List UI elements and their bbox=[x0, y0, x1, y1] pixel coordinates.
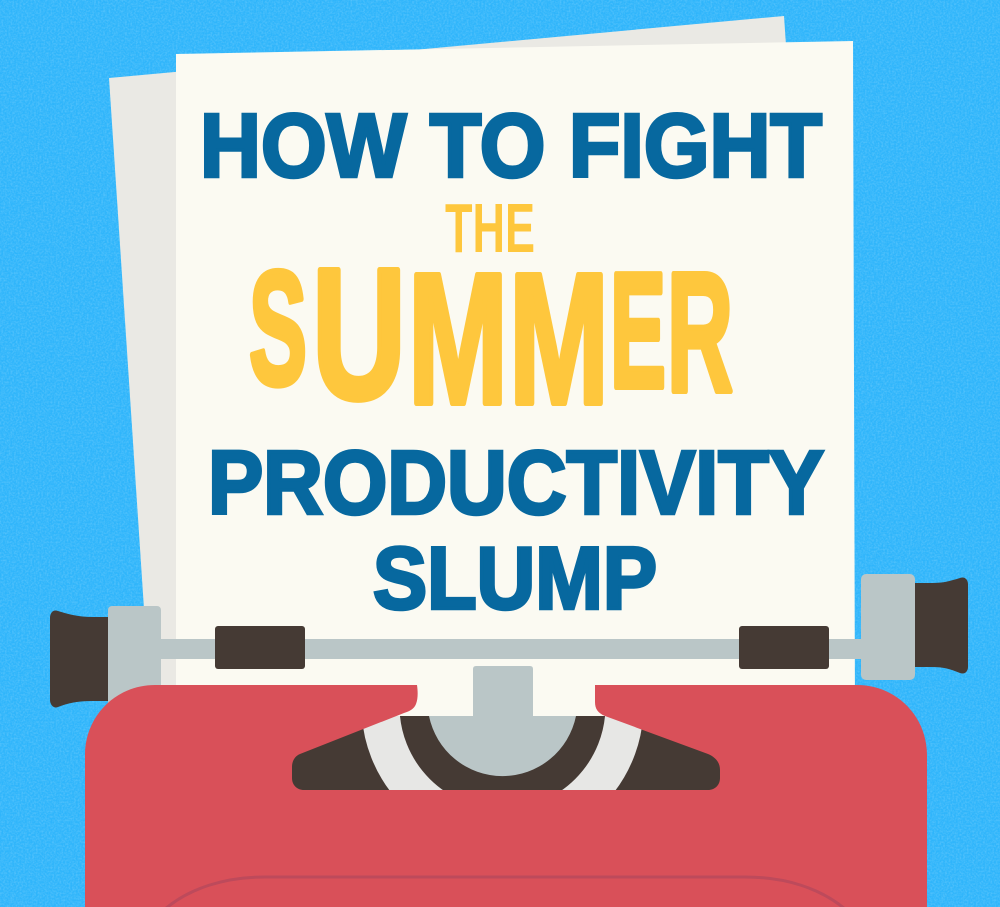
heading line: how to fight: HOW TO FIGHT bbox=[200, 96, 822, 196]
white arc band bbox=[364, 716, 642, 790]
right roller collar bbox=[861, 574, 915, 680]
heading line: productivity: PRODUCTIVITY bbox=[208, 434, 824, 534]
heading word: summer: E bbox=[610, 239, 666, 422]
heading line: slump: SLUMP bbox=[373, 528, 657, 628]
red typewriter body bbox=[85, 685, 927, 907]
dark typebar basket bbox=[285, 716, 725, 792]
left knob bbox=[50, 610, 108, 708]
heading word: the: THE bbox=[445, 189, 535, 267]
front sheet of paper bbox=[176, 41, 855, 716]
left roller collar bbox=[108, 606, 161, 710]
heading word: summer: S bbox=[249, 238, 307, 419]
roller rod bbox=[155, 639, 867, 659]
heading word: summer: R bbox=[667, 238, 733, 428]
typewriter panel outline bbox=[165, 877, 845, 907]
heading word: summer: M bbox=[408, 236, 508, 443]
typewriter roller bbox=[50, 574, 968, 710]
left paper clamp pad bbox=[215, 626, 305, 669]
heading word: summer bbox=[249, 231, 733, 443]
typebar opening bbox=[292, 666, 720, 790]
heading word: summer: U bbox=[312, 231, 406, 438]
heading word: summer: M bbox=[509, 236, 609, 443]
right knob bbox=[914, 577, 968, 674]
paper in the slot bbox=[410, 680, 600, 716]
back sheet of paper bbox=[109, 16, 787, 700]
grey semicircle guide bbox=[429, 666, 576, 776]
right paper clamp pad bbox=[739, 626, 829, 669]
title bbox=[200, 96, 824, 628]
